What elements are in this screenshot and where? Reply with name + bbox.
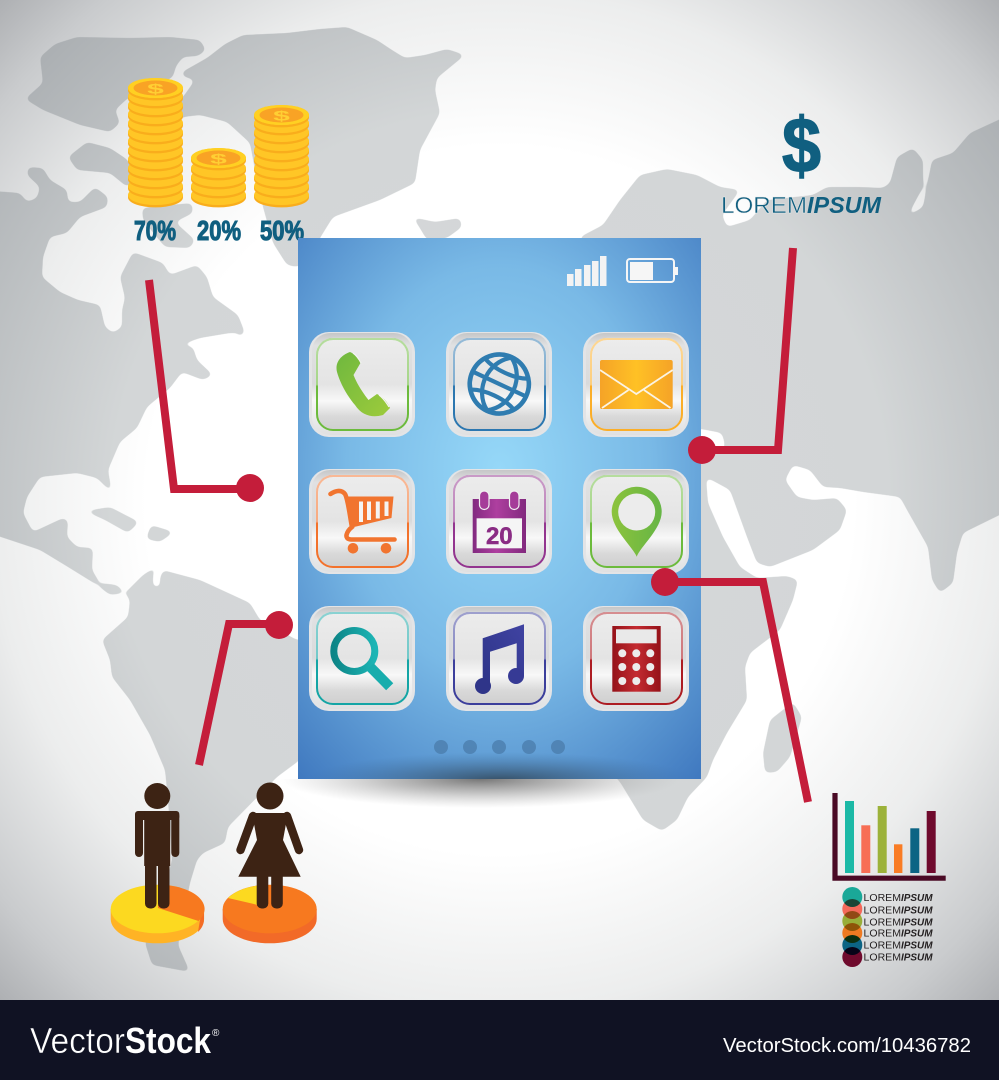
coin stack 70%: $ <box>147 81 164 96</box>
legend labels: LOREM <box>864 928 901 940</box>
legend labels: LOREM <box>864 904 901 916</box>
footer logo: Stock <box>125 1020 212 1061</box>
coin stack 70% <box>128 78 183 207</box>
chart legend <box>842 887 933 967</box>
percentage labels: 70% <box>134 215 176 246</box>
icon: man <box>135 783 179 908</box>
coin stack 50% <box>254 105 309 207</box>
connector line: dollar <box>688 248 793 464</box>
legend labels: IPSUM <box>901 904 933 916</box>
legend labels: IPSUM <box>901 939 933 951</box>
dollar sign: $ <box>782 101 821 189</box>
icon: woman <box>238 782 301 908</box>
legend labels: IPSUM <box>901 951 933 963</box>
dollar logo <box>721 101 882 218</box>
legend labels: LOREM <box>864 916 901 928</box>
pagination dots <box>434 740 565 754</box>
bars <box>845 801 936 873</box>
phone screen <box>298 238 701 808</box>
lorem ipsum brand text <box>721 192 882 218</box>
legend labels <box>864 892 933 963</box>
coin chart <box>128 78 309 246</box>
legend labels: IPSUM <box>901 892 933 904</box>
connector line: people <box>199 611 293 765</box>
legend labels: IPSUM <box>901 916 933 928</box>
legend labels: IPSUM <box>901 928 933 940</box>
footer logo <box>30 1020 220 1061</box>
legend labels: LOREM <box>864 951 901 963</box>
app icon: calculator <box>583 606 689 711</box>
pie chart: male <box>111 885 205 943</box>
app icon: shopping cart <box>309 469 415 574</box>
signal bars <box>567 256 606 286</box>
lorem ipsum brand text: IPSUM <box>807 192 882 218</box>
coin stack 20% <box>191 148 246 207</box>
percentage labels <box>134 215 304 246</box>
footer url: VectorStock.com/10436782 <box>723 1035 971 1057</box>
footer logo: ® <box>212 1028 220 1039</box>
app icon: search <box>309 606 415 711</box>
footer logo: Vector <box>30 1020 125 1061</box>
axes <box>835 793 946 878</box>
connector line: coins <box>149 280 264 502</box>
app icon: calendar: 20 <box>486 523 513 550</box>
legend labels: LOREM <box>864 892 901 904</box>
footer bar <box>0 1000 999 1080</box>
connector line: bar chart <box>651 568 808 802</box>
app icon: calendar <box>446 469 552 574</box>
percentage labels: 20% <box>197 215 241 246</box>
bar chart <box>835 793 946 878</box>
percentage labels: 50% <box>260 215 304 246</box>
battery icon <box>627 259 678 282</box>
pie chart: female <box>223 885 317 943</box>
lorem ipsum brand text: LOREM <box>721 192 807 218</box>
people on pie charts <box>111 782 317 943</box>
app icon: envelope <box>583 332 689 437</box>
coin stack 20%: $ <box>210 151 227 166</box>
app icon: phone <box>309 332 415 437</box>
legend circles <box>842 887 862 967</box>
app icon: music note <box>446 606 552 711</box>
app icon: globe <box>446 332 552 437</box>
inner bottom shade <box>340 756 660 779</box>
coin stack 50%: $ <box>273 108 290 123</box>
app icon: location pin <box>583 469 689 574</box>
legend labels: LOREM <box>864 939 901 951</box>
phone shadow <box>298 779 650 806</box>
